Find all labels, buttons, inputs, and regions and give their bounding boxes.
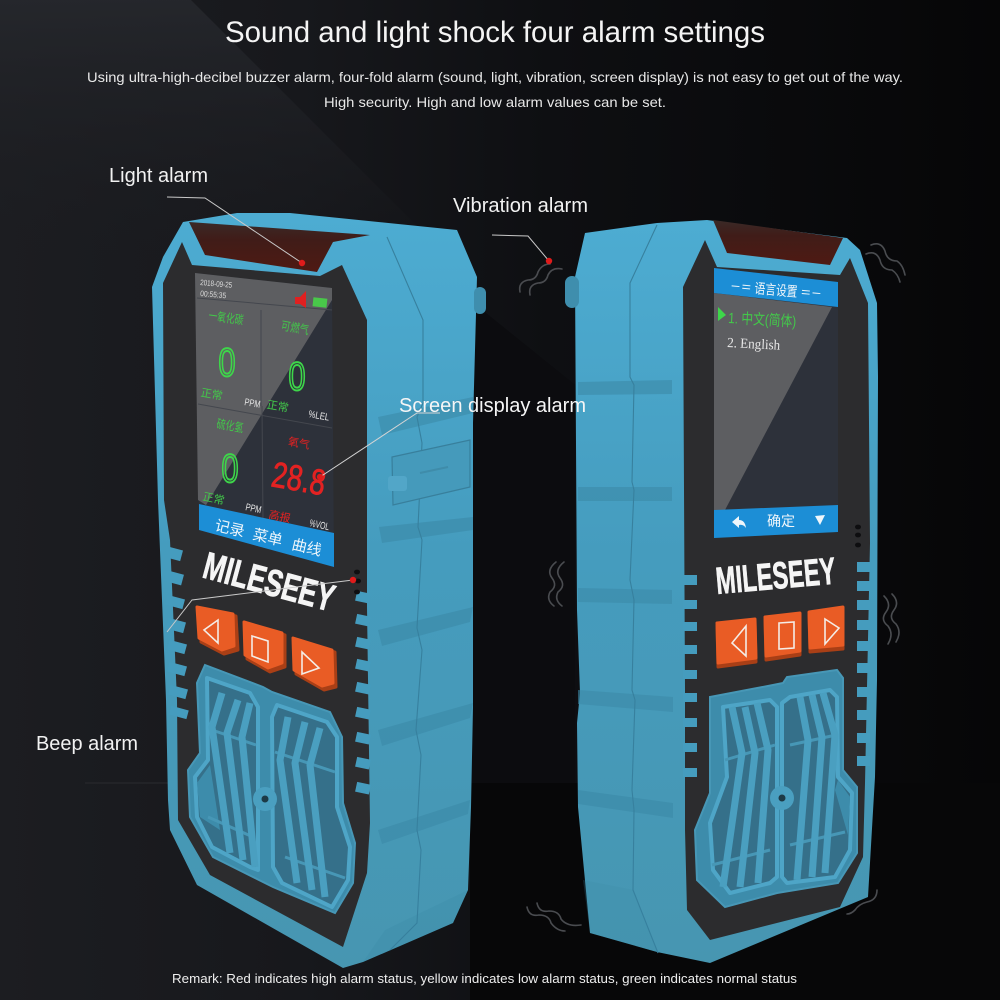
brand logo: MILESEEY [714,551,837,603]
device: left front view [152,213,486,968]
screen [714,268,838,538]
side teeth [164,546,371,795]
side ridges [578,380,673,952]
bottom menu bar: 确定 [767,513,795,529]
time stamp: 2018-09-25 [200,278,233,290]
label: Screen display alarm: Screen display alarm [399,395,586,417]
side seam [387,237,423,950]
knob [474,287,486,314]
screen labels [200,309,310,507]
side seam [630,225,658,953]
USB cover [388,440,470,505]
screen menu bar [199,504,334,567]
label: Vibration alarm: Vibration alarm [453,195,588,217]
speaker holes [855,525,861,547]
description text: High security. High and low alarm values can be set. [324,94,666,110]
unit labels: PPM [243,397,261,411]
control buttons [717,607,843,667]
screen labels: 正常 [202,490,226,507]
side teeth [683,562,870,777]
description text [87,69,903,110]
label: Screen display alarm [317,395,586,480]
label: Light alarm: Light alarm [109,165,208,187]
label: Vibration alarm [453,195,588,264]
device: right front view [565,220,878,963]
front dark panel [163,242,370,947]
body shell [575,220,878,963]
bottom menu bar [714,505,838,538]
front dark panel [683,240,870,940]
language header bar: －＝ 语言设置 ＝－ [729,278,823,302]
oxygen alarm readout: 高报 [268,507,292,525]
oxygen alarm readout: 28.8 [269,454,329,503]
light alarm window [713,220,843,265]
oxygen alarm readout [268,434,329,525]
digit readouts: 0 [288,355,306,399]
label: Beep alarm [36,577,356,755]
unit labels: PPM [244,502,262,516]
unit labels: %VOL [308,518,331,533]
side ridges [363,397,473,962]
language options: 2. English [727,336,781,354]
unit labels [243,397,331,533]
screen menu bar: 记录 [213,517,246,541]
language options [718,307,797,354]
body shell [152,213,477,968]
unit labels: %LEL [307,409,330,424]
battery icon [313,297,327,308]
screen labels: 正常 [266,398,290,415]
gas vent [695,670,857,907]
time stamp [200,278,233,300]
light alarm window [189,222,370,272]
label: Beep alarm: Beep alarm [36,733,138,755]
language options: 1. 中文(简体) [728,310,797,331]
screen labels: 硫化氢 [215,416,245,435]
screen grid [197,298,332,520]
digit readouts [218,341,306,491]
remark footnote: Remark: Red indicates high alarm status, yellow indicates low alarm status, green indicates normal status [172,971,798,986]
speaker icon [295,291,306,308]
time stamp: 00:55:35 [200,289,227,300]
screen labels: 正常 [200,386,224,403]
knob [565,276,579,308]
description text: Using ultra-high-decibel buzzer alarm, four-fold alarm (sound, light, vibration, screen display) is not easy to get out of the way. [87,69,903,85]
screen labels: 一氧化碳 [208,309,244,327]
language header bar [714,268,838,307]
gas vent [188,665,355,913]
screen menu bar: 菜单 [251,526,284,550]
vibration wave marks [520,244,905,931]
screen menu bar: 曲线 [290,536,323,560]
brand logo: MILESEEY [199,545,339,620]
label: Light alarm [109,165,305,266]
control buttons [197,607,336,690]
oxygen alarm readout: 氧气 [287,434,311,452]
digit readouts: 0 [218,341,236,385]
screen labels: 可燃气 [280,318,310,337]
digit readouts: 0 [222,447,238,491]
title: Sound and light shock four alarm settings [225,16,765,49]
screen [195,273,334,567]
speaker holes [354,570,361,594]
